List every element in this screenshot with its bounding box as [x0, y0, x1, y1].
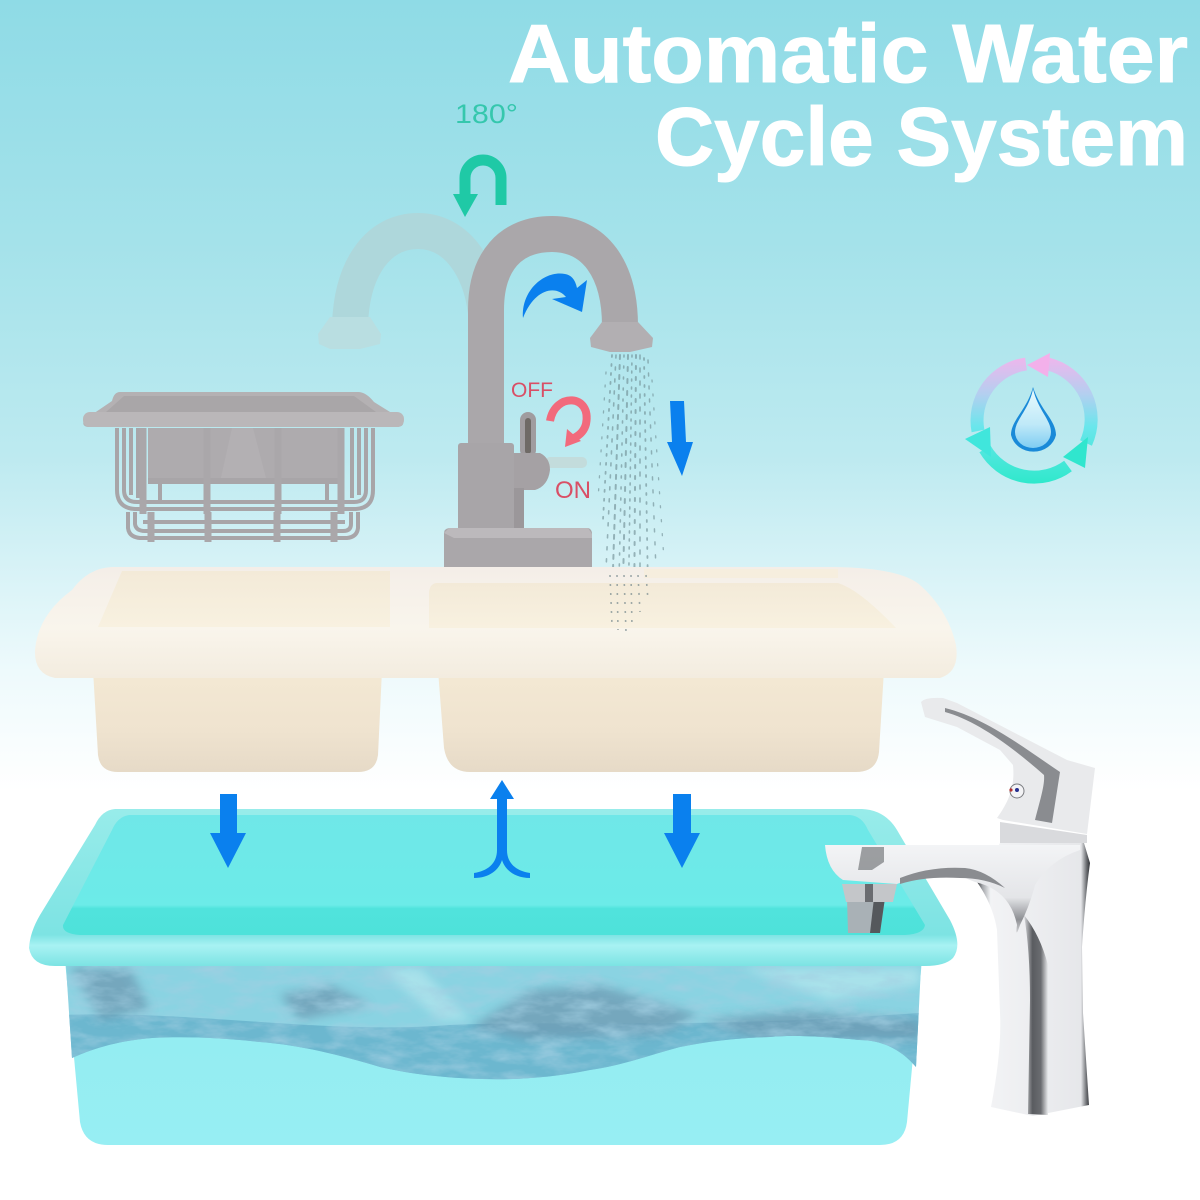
label: OFF: OFF — [511, 379, 553, 402]
basket wires — [117, 428, 373, 542]
tap handle shadows — [945, 708, 1060, 823]
tub interior — [63, 815, 925, 935]
cycle water drop — [1011, 387, 1056, 452]
cycle icon — [965, 353, 1091, 477]
faucet: ghost rotated position — [318, 231, 486, 349]
basket front rim — [83, 412, 404, 427]
sink — [35, 567, 957, 772]
faucet: main — [444, 234, 653, 575]
chrome tap — [825, 698, 1095, 1116]
dish basket — [83, 392, 404, 542]
arrow: center up split — [474, 780, 530, 878]
basket inner panel — [148, 428, 338, 478]
left basin opening — [98, 571, 390, 627]
tap spout — [825, 845, 1080, 932]
title: Automatic Water — [508, 7, 1188, 100]
icon: blue swing arrow — [523, 273, 587, 318]
right basin opening — [429, 583, 896, 628]
tub water print — [66, 966, 921, 1080]
water tub — [29, 809, 957, 1145]
tap body dark strip — [1024, 915, 1048, 1115]
cycle ring — [977, 364, 1091, 477]
tub body — [65, 960, 922, 1145]
faucet nozzle — [590, 322, 653, 352]
tap spout shadow — [900, 868, 1005, 888]
title: Cycle System — [655, 90, 1188, 183]
tap collar — [1000, 822, 1087, 843]
icon: red lever arrow — [550, 400, 587, 447]
sink rim — [35, 567, 957, 678]
tap handle — [921, 698, 1095, 834]
sink left basin body — [93, 670, 382, 772]
tub rim — [29, 809, 957, 966]
water spray over basin — [610, 575, 648, 632]
water spray — [598, 355, 664, 630]
faucet stem and spout — [486, 234, 620, 450]
faucet base — [444, 528, 592, 575]
right basin slot — [644, 569, 838, 578]
cycle arrowheads — [1027, 353, 1050, 377]
tap body — [977, 843, 1090, 1116]
title — [508, 7, 1188, 183]
arrow: right down — [664, 794, 700, 868]
icon: 180 degree rotation arrow — [453, 160, 501, 217]
label: 180 degrees: 180° — [455, 99, 518, 129]
icon: blue arrow beside water — [667, 401, 693, 476]
arrow: left down — [210, 794, 246, 868]
tap aerator — [842, 884, 897, 902]
faucet lever — [512, 412, 587, 490]
tap indicator — [1009, 784, 1024, 798]
faucet body — [458, 443, 514, 533]
label: ON: ON — [555, 477, 591, 504]
basket back wall and rim — [83, 392, 403, 427]
sink right basin body — [438, 670, 884, 772]
tap water stream — [847, 898, 885, 933]
